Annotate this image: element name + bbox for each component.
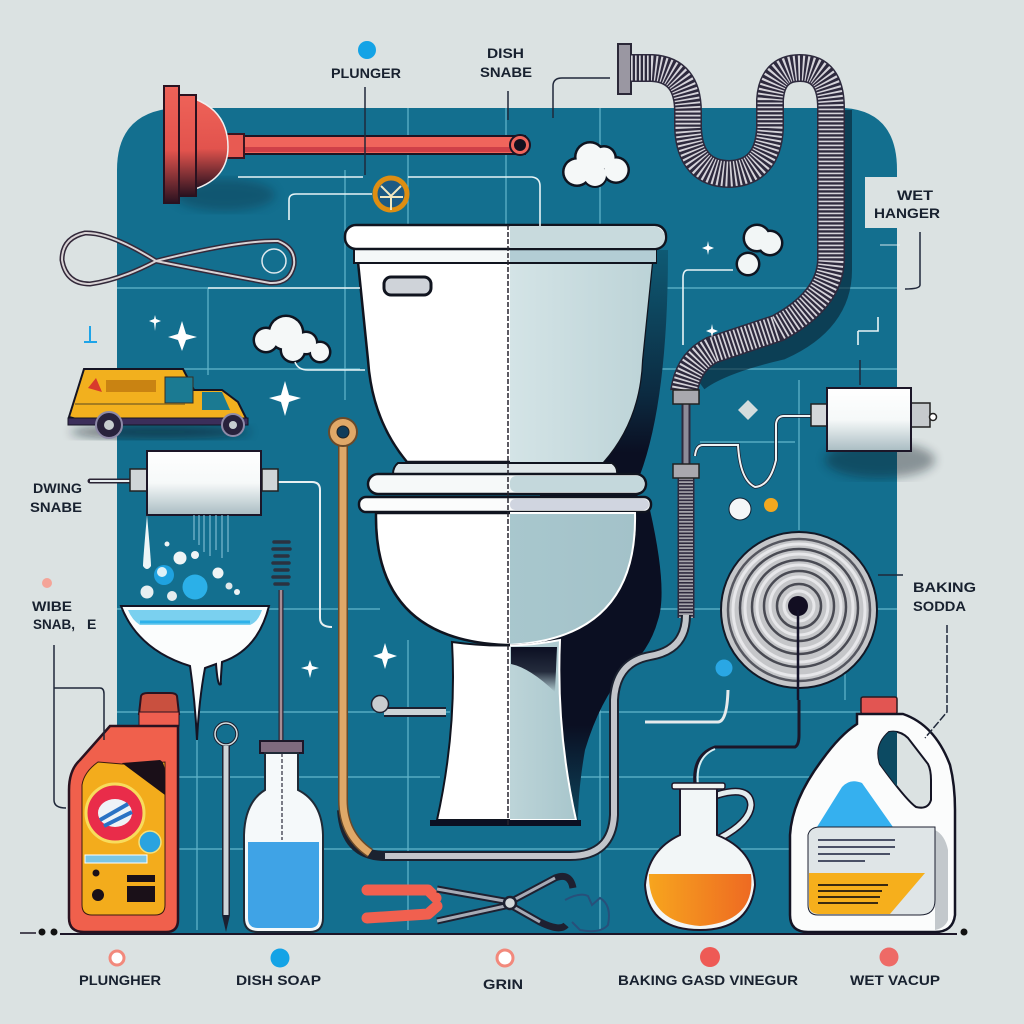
label: wipe snake: SNAB,: [33, 616, 75, 632]
icon: cloud near tank: [736, 224, 784, 276]
label: baking soda: BAKING: [913, 579, 976, 595]
label: bottom plungher: [79, 951, 161, 988]
toilet tank: [358, 262, 652, 462]
label: top plunger: PLUNGER: [331, 65, 401, 81]
toilet seat: [359, 463, 651, 512]
icon: paper roll right: [695, 388, 936, 487]
toilet pedestal: [430, 640, 581, 826]
icon: yellow van: [68, 369, 250, 439]
label: drying snake: [30, 480, 82, 515]
label: wet hanger: WET: [897, 187, 934, 203]
icon: round flask: [645, 700, 799, 930]
label: wipe snake: E: [87, 616, 96, 632]
icon: toilet drop shadow: [540, 250, 668, 822]
label: baking gasd vinegur: [618, 947, 798, 988]
label: drying snake: DWING: [33, 480, 82, 496]
icon: plunger: [164, 86, 530, 211]
label: bottom dish soap: [236, 948, 321, 988]
label: bottom plungher: PLUNGHER: [79, 972, 161, 988]
label: baking soda: SODDA: [913, 598, 966, 614]
icon: orange valve: [375, 178, 407, 210]
label: wet hanger: [865, 177, 940, 228]
icon: silver and tan supply pipe: [329, 418, 686, 856]
icon: red and yellow bottle: [69, 693, 179, 932]
icon: paper roll left: [90, 451, 332, 627]
label: baking soda: [913, 579, 976, 614]
label: blue T mark: [84, 326, 97, 342]
icon: sparkles: [149, 241, 758, 678]
label: bottom grin: GRIN: [483, 976, 523, 992]
label: top dish snake: SNABE: [480, 64, 532, 80]
icon: handle rod left: [372, 696, 446, 712]
callout leader lines: [54, 78, 947, 808]
label: wet vacup: WET VACUP: [850, 972, 940, 988]
toilet bowl: [376, 513, 635, 645]
label: bottom grin: [483, 950, 523, 992]
label: top dish snake: DISH: [487, 45, 524, 61]
icon: white ball: [729, 498, 751, 520]
icon: flexible drain hose: [618, 44, 838, 392]
icon: white jug: [790, 697, 955, 932]
label: top dish snake: [480, 45, 532, 80]
icon: blue liquid bottle: [244, 741, 323, 932]
label: wipe snake: WIBE: [32, 598, 72, 614]
icon: cloud top right of plunger: [562, 141, 630, 188]
label: wet hanger: HANGER: [874, 205, 940, 221]
icon: water droplets: [140, 515, 240, 601]
label: wet vacup: [850, 948, 940, 988]
label: baking gasd vinegur: BAKING GASD VINEGUR: [618, 972, 798, 988]
icon: handle rod right: [645, 690, 728, 722]
icon: metal wire coil: [721, 532, 877, 700]
icon: pliers: [367, 876, 609, 931]
icon: cloud left of tank: [252, 314, 332, 364]
flush handle: [384, 277, 431, 295]
label: top plunger: [331, 41, 401, 81]
icon: probe tool: [215, 723, 237, 932]
icon: white basin: [121, 606, 269, 740]
tank lid: [345, 225, 666, 263]
icon: toilet: [345, 225, 666, 826]
icon: wire loop tool: [62, 233, 294, 284]
panel: blue background: [117, 108, 897, 934]
baseline rule: [20, 928, 968, 936]
icon: bottle brush: [273, 542, 290, 745]
icon: orange dot: [764, 498, 778, 512]
label: drying snake: SNABE: [30, 499, 82, 515]
label: bottom dish soap: DISH SOAP: [236, 972, 321, 988]
icon: vertical drain pipe: [673, 390, 699, 618]
label: wipe snake: [32, 578, 96, 632]
icon: blue dot: [716, 660, 732, 676]
